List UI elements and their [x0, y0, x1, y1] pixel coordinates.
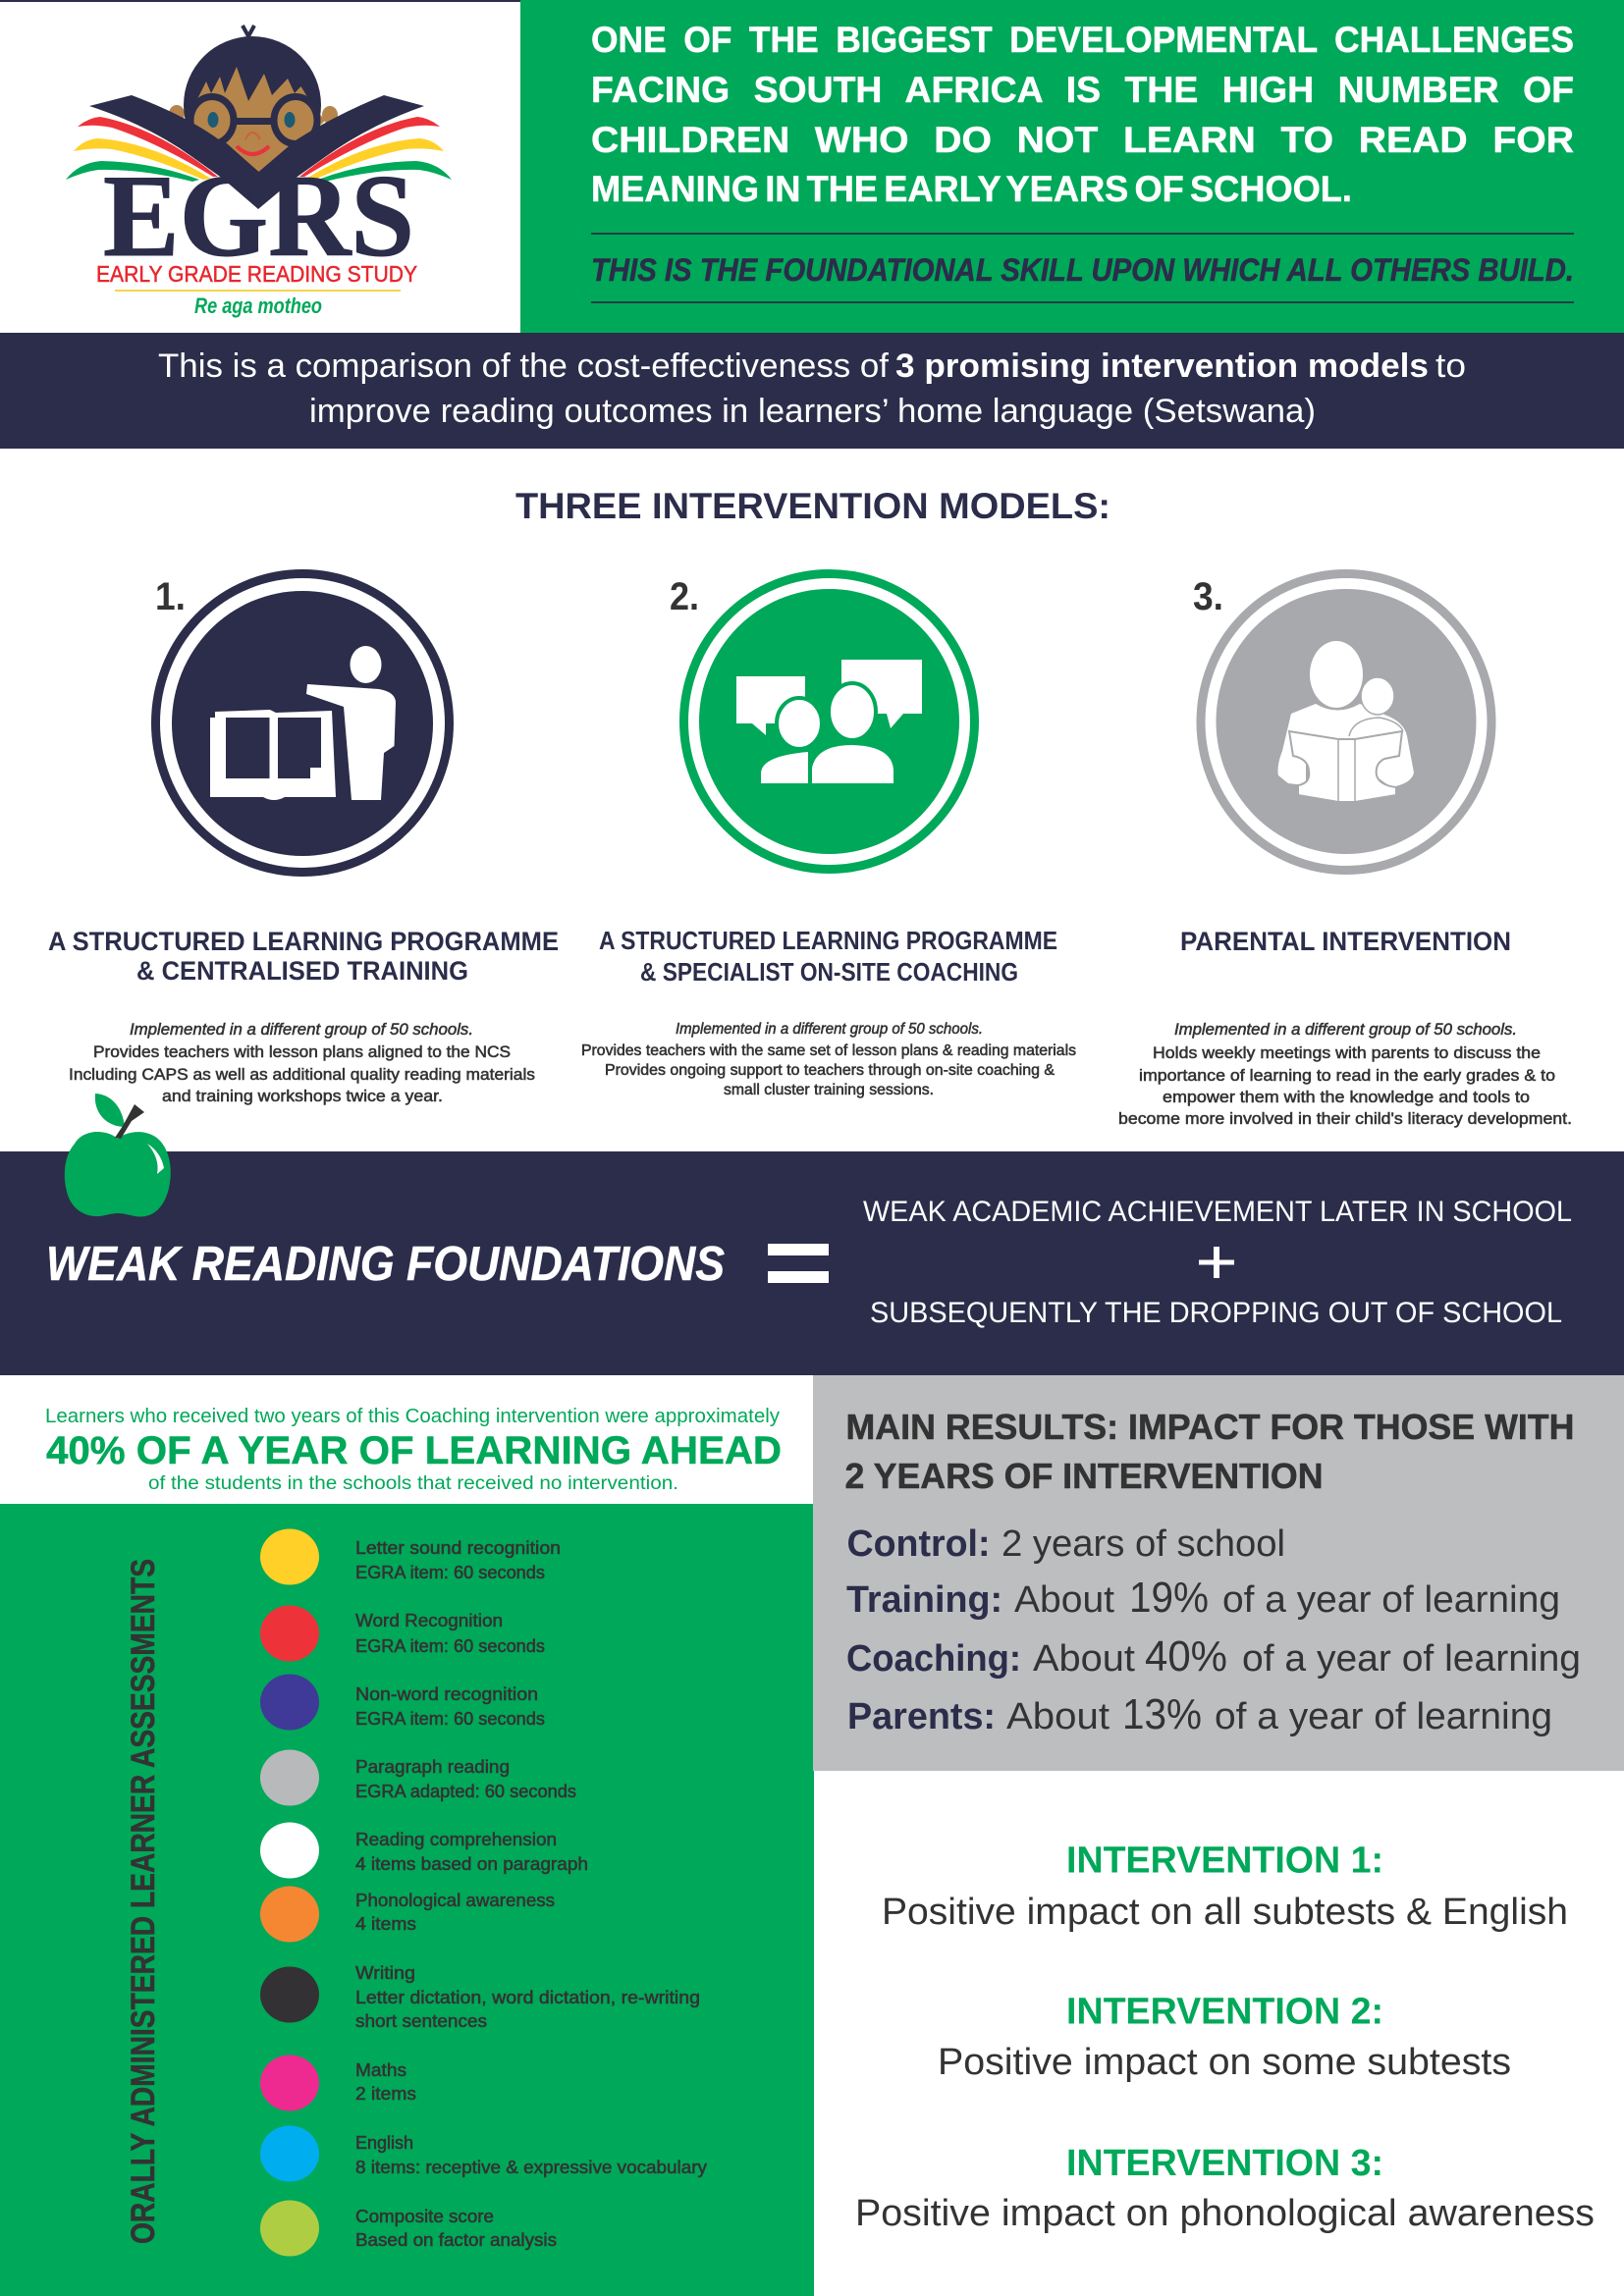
intervention 1 summary: Positive impact on all subtests & English — [882, 1892, 1568, 1933]
assessment: non-word recognition: Non-word recognition — [355, 1684, 538, 1704]
panel: header statement — [520, 0, 1624, 333]
assessment: word recognition: EGRA item: 60 seconds — [355, 1636, 545, 1656]
model 3 description — [1118, 1020, 1572, 1128]
assessment: writing: Writing — [355, 1963, 415, 1983]
assessment: maths — [260, 2056, 416, 2110]
intervention 3 summary: Positive impact on phonological awareness — [855, 2193, 1595, 2234]
assessment: word recognition — [260, 1606, 545, 1661]
model 3 description: become more involved in their child's literacy development. — [1118, 1109, 1572, 1128]
logo: child's head — [169, 26, 338, 174]
main results heading: 2 YEARS OF INTERVENTION — [844, 1456, 1324, 1496]
weak reading foundations heading: WEAK READING FOUNDATIONS — [46, 1238, 725, 1291]
header statement text: CHILDREN WHO DO NOT LEARN TO READ FOR — [591, 120, 1574, 160]
result: control: 2 years of school — [1001, 1523, 1285, 1565]
result: training: 19% — [1129, 1574, 1209, 1622]
assessment: maths: Maths — [355, 2060, 406, 2080]
result: control: Control: — [846, 1523, 990, 1565]
panel: weak reading foundations band — [0, 1094, 1624, 1375]
number 3: 3. — [1193, 575, 1223, 618]
assessment: writing — [260, 1963, 700, 2031]
assessment: composite score: Composite score — [355, 2207, 494, 2226]
logo: EGRS early grade reading study — [66, 26, 452, 318]
assessment: composite score — [260, 2201, 557, 2256]
model 3: parental intervention — [1118, 573, 1572, 1128]
comparison intro text — [158, 347, 1466, 430]
assessment: reading comprehension: Reading comprehension — [355, 1830, 557, 1849]
logo: EGRS letters: EGRS — [103, 150, 414, 281]
model 1 description: Implemented in a different group of 50 schools. — [130, 1020, 473, 1039]
result: parents: About — [1006, 1696, 1110, 1737]
assessment: reading comprehension — [260, 1822, 588, 1879]
model 2 description — [581, 1021, 1076, 1098]
icon: teacher with book — [155, 573, 450, 872]
assessment: writing: short sentences — [355, 2011, 487, 2031]
consequences text: WEAK ACADEMIC ACHIEVEMENT LATER IN SCHOOL — [863, 1196, 1572, 1228]
intervention 1 summary: INTERVENTION 1: — [1066, 1840, 1383, 1881]
assessment: writing: Letter dictation, word dictation, re-writing — [355, 1988, 700, 2007]
assessment: letter sound recognition: Letter sound recognition — [355, 1538, 561, 1558]
result: training: of a year of learning — [1222, 1579, 1560, 1621]
comparison intro text: 3 promising intervention models — [895, 347, 1429, 385]
model 2 description: Provides teachers with the same set of lesson plans & reading materials — [581, 1042, 1076, 1059]
assessment: letter sound recognition — [260, 1529, 561, 1584]
model 1 title: A STRUCTURED LEARNING PROGRAMME — [48, 927, 559, 956]
intervention 1 summary — [882, 1840, 1568, 1933]
result: parents: of a year of learning — [1215, 1696, 1552, 1737]
header statement text: FACING SOUTH AFRICA IS THE HIGH NUMBER OF — [591, 70, 1574, 110]
model 3 description: importance of learning to read in the early grades & to — [1139, 1066, 1555, 1085]
icon: parent reading with child — [1201, 573, 1491, 870]
model 2 title: A STRUCTURED LEARNING PROGRAMME — [599, 926, 1057, 955]
assessment: non-word recognition: EGRA item: 60 seconds — [355, 1709, 545, 1729]
assessment: english: 8 items: receptive & expressive vocabulary — [355, 2158, 707, 2177]
logo: tagline: Re aga motheo — [194, 294, 322, 318]
result: training: About — [1014, 1579, 1114, 1621]
intervention 3 summary: INTERVENTION 3: — [1066, 2143, 1383, 2184]
result: coaching: of a year of learning — [1242, 1638, 1581, 1680]
logo: book spine tip — [245, 180, 271, 209]
intervention 2 summary: Positive impact on some subtests — [938, 2042, 1511, 2083]
assessment: phonological awareness — [260, 1887, 555, 1942]
assessment: non-word recognition — [260, 1675, 545, 1730]
model 1 description: and training workshops twice a year. — [162, 1087, 443, 1105]
model 2: structured programme and on-site coaching — [581, 573, 1076, 1098]
model 3 title: PARENTAL INTERVENTION — [1180, 927, 1511, 956]
panel: comparison intro band — [0, 333, 1624, 449]
panel: orally administered learner assessments — [0, 1504, 814, 2296]
logo: coloured page stripes — [66, 117, 452, 182]
model 2 description: small cluster training sessions. — [724, 1082, 934, 1098]
result: training: Training: — [846, 1579, 1002, 1621]
model 1 title — [48, 927, 559, 986]
comparison intro text: to — [1435, 347, 1466, 385]
model 1: structured programme and centralised training — [48, 573, 559, 1105]
assessment: phonological awareness: Phonological awareness — [355, 1891, 555, 1910]
model 2 description: Provides ongoing support to teachers through on-site coaching & — [605, 1062, 1055, 1079]
icon: green apple — [65, 1094, 171, 1216]
number 1: 1. — [155, 575, 186, 618]
panel: main results — [813, 1375, 1624, 1771]
equals sign — [768, 1244, 829, 1283]
header statement text — [591, 20, 1574, 209]
callout: 40 percent of a year ahead: of the students in the schools that received no intervention. — [148, 1473, 678, 1494]
callout: 40 percent of a year ahead: Learners who received two years of this Coaching intervention were approximately — [45, 1406, 780, 1427]
result: coaching: Coaching: — [846, 1638, 1021, 1680]
assessment: paragraph reading: EGRA adapted: 60 seconds — [355, 1782, 576, 1801]
assessment: word recognition: Word Recognition — [355, 1611, 503, 1630]
vertical heading: ORALLY ADMINISTERED LEARNER ASSESSMENTS — [125, 1559, 162, 2244]
assessment: letter sound recognition: EGRA item: 60 seconds — [355, 1563, 545, 1582]
assessment: paragraph reading: Paragraph reading — [355, 1757, 510, 1777]
result: parents: Parents: — [847, 1696, 996, 1737]
heading: three intervention models: THREE INTERVENTION MODELS: — [515, 486, 1110, 526]
model 2 title — [599, 926, 1057, 987]
comparison intro text: improve reading outcomes in learners’ home language (Setswana) — [309, 393, 1316, 430]
assessment: paragraph reading — [260, 1749, 576, 1806]
model 2 description: Implemented in a different group of 50 schools. — [676, 1021, 983, 1038]
intervention 3 summary — [855, 2143, 1595, 2234]
main results heading: MAIN RESULTS: IMPACT FOR THOSE WITH — [846, 1407, 1575, 1447]
number 2: 2. — [670, 575, 699, 618]
intervention 2 summary: INTERVENTION 2: — [1066, 1991, 1383, 2032]
header statement text: ONE OF THE BIGGEST DEVELOPMENTAL CHALLENGES — [591, 20, 1574, 60]
logo: study name: EARLY GRADE READING STUDY — [96, 261, 417, 287]
assessment: phonological awareness: 4 items — [355, 1914, 416, 1934]
result: coaching — [846, 1632, 1581, 1681]
comparison intro text: This is a comparison of the cost-effectiveness of — [158, 347, 890, 385]
result: coaching: About — [1033, 1638, 1135, 1680]
callout: 40 percent of a year ahead — [45, 1406, 782, 1494]
model 2 title: & SPECIALIST ON-SITE COACHING — [640, 957, 1018, 987]
result: control — [846, 1523, 1285, 1565]
model 3 description: Holds weekly meetings with parents to discuss the — [1153, 1043, 1541, 1062]
model 3 description: Implemented in a different group of 50 schools. — [1174, 1020, 1517, 1039]
header statement text: MEANING IN THE EARLY YEARS OF SCHOOL. — [591, 169, 1352, 209]
assessment: english: English — [355, 2133, 413, 2153]
result: training — [846, 1574, 1560, 1622]
model 1 description: Provides teachers with lesson plans aligned to the NCS — [93, 1042, 511, 1061]
model 3 description: empower them with the knowledge and tools to — [1163, 1088, 1530, 1106]
consequences text: SUBSEQUENTLY THE DROPPING OUT OF SCHOOL — [870, 1297, 1562, 1329]
model 1 title: & CENTRALISED TRAINING — [136, 956, 468, 986]
model 1 description: Including CAPS as well as additional quality reading materials — [69, 1065, 535, 1084]
model 1 description — [69, 1020, 535, 1105]
consequences text — [863, 1196, 1572, 1329]
intervention 2 summary — [938, 1991, 1511, 2083]
assessment: reading comprehension: 4 items based on paragraph — [355, 1854, 588, 1874]
logo: open book wings — [89, 95, 424, 209]
icon: two people talking — [683, 573, 974, 870]
main results heading — [844, 1407, 1575, 1496]
result: parents: 13% — [1122, 1690, 1202, 1738]
assessment: maths: 2 items — [355, 2084, 416, 2104]
assessment: english — [260, 2126, 707, 2181]
result: coaching: 40% — [1145, 1632, 1227, 1681]
result: parents — [847, 1690, 1552, 1738]
assessment: composite score: Based on factor analysis — [355, 2230, 557, 2250]
callout: 40 percent of a year ahead: 40% OF A YEAR OF LEARNING AHEAD — [46, 1429, 782, 1472]
